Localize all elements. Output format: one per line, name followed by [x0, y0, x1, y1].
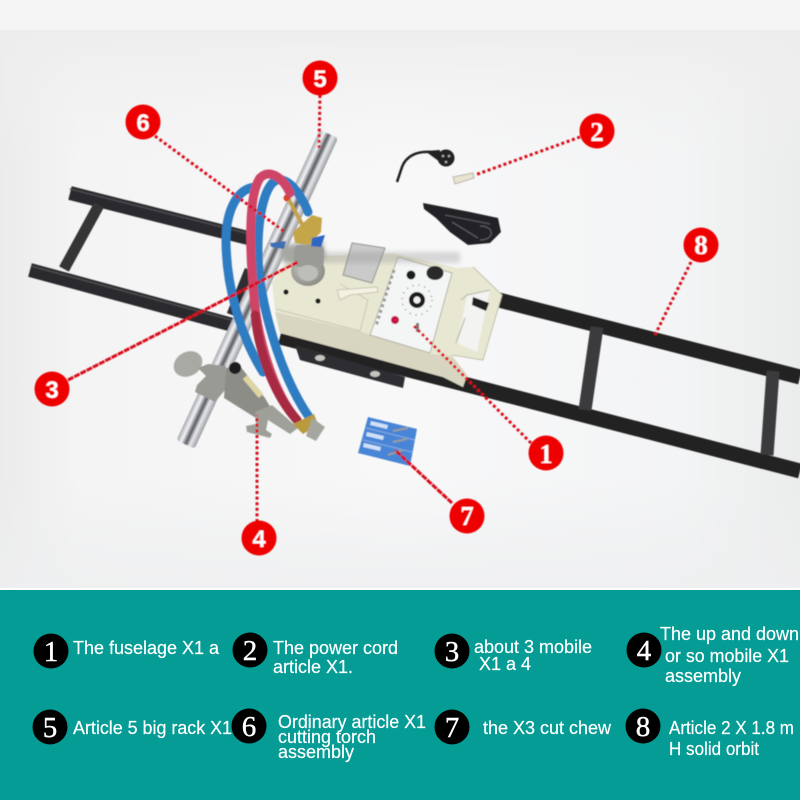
callout marker 7: 7	[460, 501, 474, 531]
callout marker 8	[684, 228, 718, 262]
callout marker 1: 1	[539, 439, 553, 469]
legend item 3: 3	[445, 636, 459, 668]
callout marker 2	[580, 114, 614, 148]
legend item 1: The fuselage X1 a	[73, 637, 220, 658]
legend item 6: cutting torch	[278, 726, 376, 747]
callout line 7	[395, 450, 452, 503]
callout line 1	[413, 325, 531, 443]
callout marker 5	[302, 60, 338, 96]
nameplate	[343, 243, 385, 283]
callout marker 1	[528, 436, 564, 470]
legend item 7	[434, 710, 612, 744]
callout line 4	[256, 415, 258, 522]
callout marker 7	[450, 498, 484, 534]
legend item 4	[626, 623, 799, 686]
lower torch assembly	[169, 346, 325, 441]
legend item 8: 8	[636, 711, 650, 743]
callout line 6	[155, 136, 285, 232]
control panel	[370, 257, 452, 353]
legend item 8	[626, 708, 794, 759]
callout marker 2: 2	[590, 117, 604, 147]
legend item 5: 5	[43, 712, 57, 744]
legend item 4: 4	[637, 635, 652, 667]
legend item 4: assembly	[665, 665, 742, 686]
machine handle	[452, 267, 502, 360]
brass valve assembly	[270, 194, 325, 249]
legend item 2: The power cord	[273, 637, 398, 658]
legend item 4: The up and down	[660, 623, 799, 644]
machine body	[272, 253, 502, 387]
legend item 7: the X3 cut chew	[483, 717, 612, 738]
legend item 5: Article 5 big rack X1	[73, 717, 232, 738]
callout line 3	[68, 262, 298, 380]
callout marker 3: 3	[45, 377, 59, 404]
legend item 2	[232, 632, 398, 677]
watermark smudge	[310, 252, 460, 263]
legend item 3: about 3 mobile	[474, 636, 592, 657]
photo contents	[30, 60, 800, 556]
legend item 1	[34, 634, 220, 668]
legend item 7: 7	[445, 712, 459, 744]
legend item 6: Ordinary article X1	[278, 711, 426, 732]
legend item 2: article X1.	[273, 656, 353, 677]
legend item 3: X1 a 4	[479, 653, 531, 674]
blue cutter nozzle box	[358, 417, 417, 466]
rail track left section	[30, 189, 252, 327]
torch mount cylinder	[280, 240, 326, 286]
top white strip	[0, 0, 800, 30]
blue and red hoses	[226, 174, 309, 420]
legend item 1: 1	[44, 636, 58, 668]
legend item 4: or so mobile X1	[665, 645, 789, 666]
legend item 5	[32, 710, 232, 744]
legend item 6: 6	[242, 711, 256, 743]
panel: parts legend	[0, 588, 800, 800]
legend item 3	[434, 634, 592, 674]
callout marker 4	[242, 520, 276, 556]
callout line 8	[654, 262, 691, 337]
black base plate	[295, 345, 405, 388]
power cord and plug	[397, 150, 474, 184]
callout marker 5: 5	[313, 66, 327, 93]
callout line 2	[475, 137, 580, 175]
callout marker 3	[34, 372, 70, 406]
rail track right section	[280, 299, 800, 471]
legend item 8: H solid orbit	[669, 738, 759, 759]
legend item 6	[232, 708, 426, 762]
legend item 2: 2	[243, 635, 257, 667]
callout marker 6	[126, 104, 160, 140]
legend item 6: assembly	[278, 741, 355, 762]
chrome rod	[176, 130, 338, 449]
callout marker 8: 8	[694, 230, 708, 260]
callout marker 6: 6	[136, 110, 150, 137]
callout marker 4: 4	[252, 526, 266, 553]
callout line 5	[319, 95, 320, 148]
coiled black cable	[423, 203, 501, 245]
